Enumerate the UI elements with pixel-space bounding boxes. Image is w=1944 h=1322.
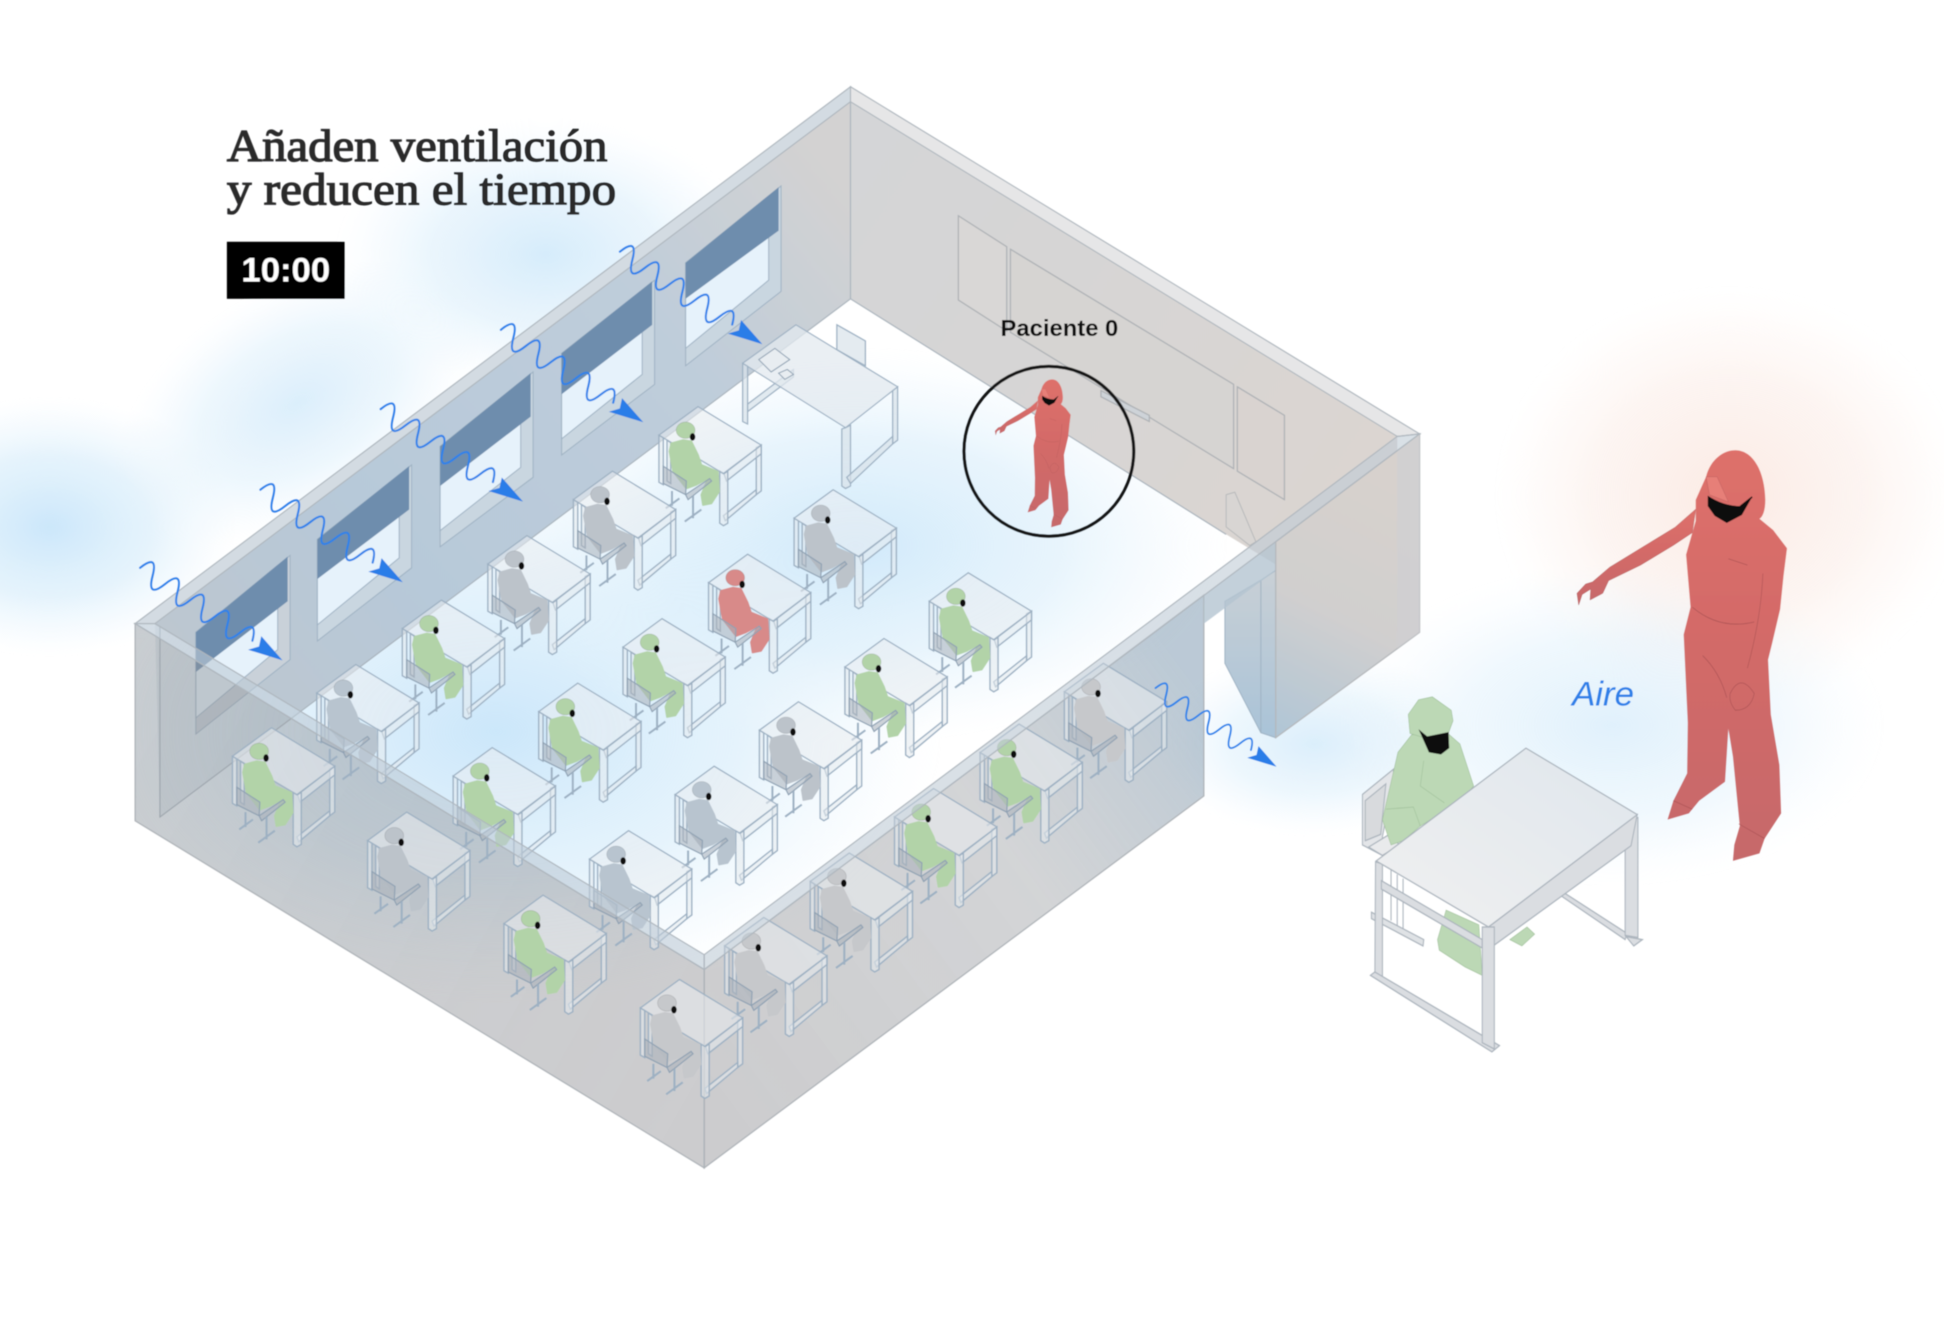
- large green student at desk: [1362, 697, 1642, 1052]
- title: y reducen el tiempo: [227, 164, 616, 215]
- desk frame: [1370, 815, 1642, 1052]
- large red patient figure: [1577, 450, 1787, 861]
- window 3: [440, 372, 533, 547]
- desks: third row: [504, 573, 1032, 1014]
- classroom back walls: [155, 102, 1397, 817]
- desks: row by windows: [232, 407, 761, 847]
- wall top edges: [135, 87, 1420, 970]
- chair: [1362, 769, 1424, 946]
- time badge: 10:00: [241, 251, 330, 289]
- patient zero circle: [964, 366, 1134, 536]
- door wedge: [1226, 492, 1256, 546]
- window 2: [317, 465, 412, 641]
- air label: Aire: [1570, 675, 1634, 713]
- time badge: [227, 242, 345, 299]
- mask: [1419, 729, 1449, 754]
- desks: second row with infected student: [368, 490, 896, 931]
- desks: fourth row by front wall: [640, 663, 1167, 1098]
- window 1: [196, 555, 290, 734]
- front walls: [135, 434, 1420, 1168]
- window 4: [562, 280, 655, 455]
- teacher desk: [743, 325, 898, 488]
- patient zero label: Paciente 0: [1001, 315, 1118, 341]
- air arrow 4: [495, 320, 649, 432]
- patient zero figure: [995, 379, 1071, 527]
- desk top: [1376, 748, 1637, 927]
- title: Añaden ventilación: [227, 120, 608, 171]
- air arrow 1: [134, 558, 289, 670]
- air arrow door exit: [1150, 680, 1282, 775]
- air arrow 5: [614, 242, 768, 354]
- air arrow 3: [375, 400, 529, 511]
- background air haze: [0, 128, 1900, 928]
- air arrow 2: [254, 480, 409, 592]
- student body: [1382, 697, 1535, 975]
- window 5: [686, 186, 781, 366]
- blackboard: [958, 216, 1284, 500]
- door leaf: [1225, 570, 1276, 738]
